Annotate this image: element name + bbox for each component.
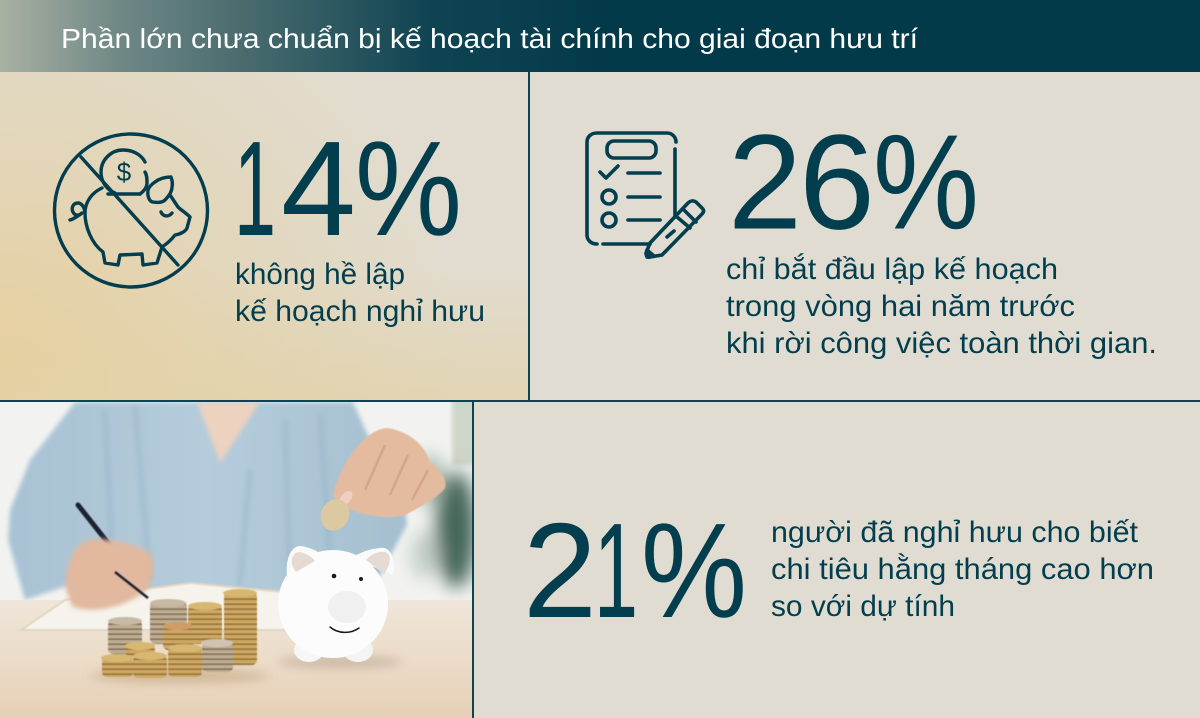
description: spending higher than expected: so với dự tính bbox=[771, 590, 955, 623]
description: spending higher than expected bbox=[771, 516, 1154, 623]
plant bbox=[411, 454, 476, 588]
stat: 26% bbox=[728, 106, 979, 258]
icon: crossed-out piggy bank bbox=[54, 134, 208, 287]
blouse bbox=[8, 402, 407, 600]
stat: 26%: 2 bbox=[728, 106, 802, 258]
stat: 21%: % bbox=[641, 495, 747, 646]
panel: 26% planning late bbox=[530, 72, 1200, 400]
stat: 21%: 2 bbox=[523, 495, 597, 646]
table bbox=[0, 600, 472, 718]
description: planning two years before: chỉ bắt đầu lập kế hoạch bbox=[726, 253, 1058, 286]
hand holding coin bbox=[316, 428, 445, 535]
panel: 21% higher spending bbox=[474, 402, 1200, 718]
description: no retirement plan bbox=[235, 258, 485, 328]
stat: 26%: 6 bbox=[799, 106, 875, 258]
stat: 14%: 4 bbox=[281, 113, 356, 264]
description: planning two years before bbox=[726, 253, 1157, 360]
description: no retirement plan: không hề lập bbox=[235, 258, 405, 291]
stat: 21%: 1 bbox=[594, 495, 638, 646]
stat: 14% bbox=[234, 113, 462, 264]
photo: hands, coins and piggy bank bbox=[0, 395, 482, 718]
description: spending higher than expected: người đã nghỉ hưu cho biết bbox=[771, 516, 1139, 549]
description: no retirement plan: kế hoạch nghỉ hưu bbox=[235, 295, 485, 328]
stat: 21% bbox=[523, 495, 747, 646]
header bar bbox=[0, 0, 1200, 72]
stat: 26%: % bbox=[873, 106, 979, 258]
panel: 14% no retirement plan bbox=[0, 72, 528, 400]
description: planning two years before: khi rời công việc toàn thời gian. bbox=[726, 327, 1157, 360]
stat: 14%: 1 bbox=[234, 113, 276, 264]
description: planning two years before: trong vòng hai năm trước bbox=[726, 290, 1075, 323]
title: Phần lớn chưa chuẩn bị kế hoạch tài chính cho giai đoạn hưu trí bbox=[61, 23, 918, 54]
notebook bbox=[21, 583, 285, 630]
stat: 14%: % bbox=[355, 113, 462, 264]
writing hand and pen bbox=[66, 505, 154, 610]
icon: dollar sign: $ bbox=[117, 157, 132, 187]
description: spending higher than expected: chi tiêu hằng tháng cao hơn bbox=[771, 553, 1154, 586]
coin stacks bbox=[90, 589, 270, 683]
icon: checklist and pencil bbox=[587, 133, 704, 257]
piggy bank bbox=[278, 546, 402, 668]
